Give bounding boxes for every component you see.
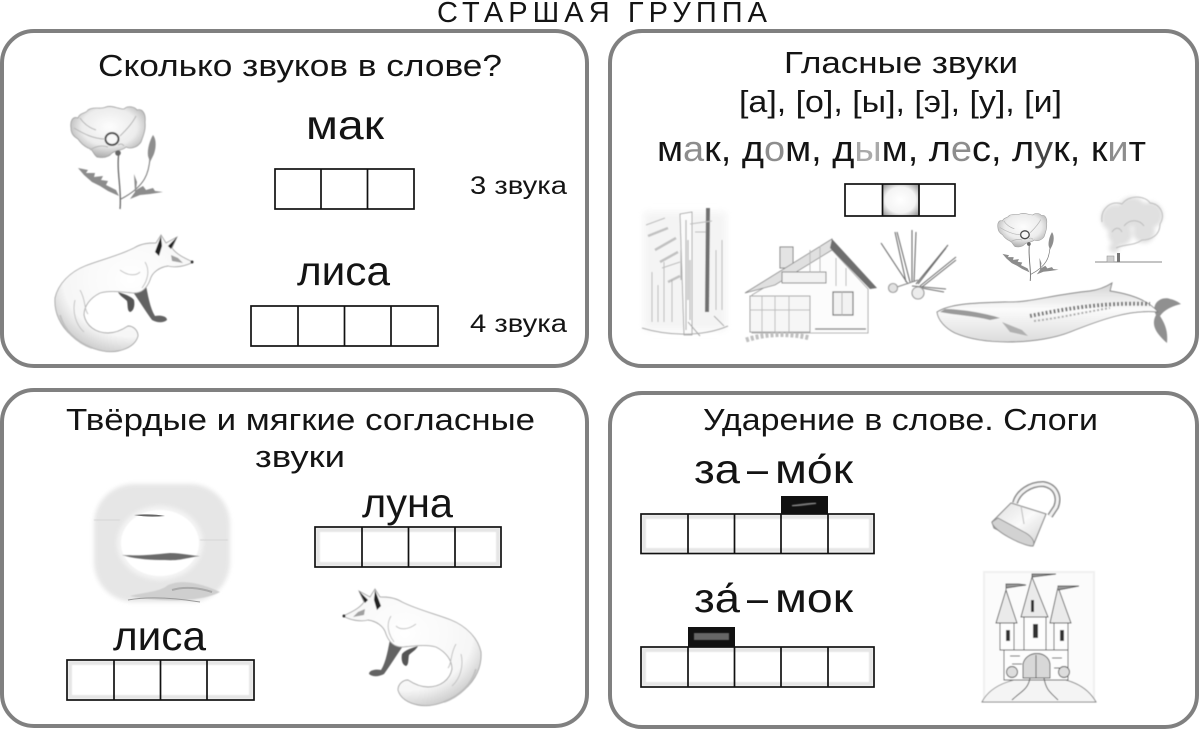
word: za-mok stressed second: мо́к [775, 446, 854, 492]
icon: padlock [992, 484, 1057, 546]
panel: how many sounds in a word [2, 31, 587, 366]
icon: house [745, 239, 877, 340]
heading: how many sounds: Сколько звуков в слове? [98, 48, 502, 83]
icon: onion plant [881, 230, 956, 299]
word: za-mok stressed first: – [747, 575, 768, 621]
sound boxes: mak [275, 169, 414, 209]
icon: small poppy [998, 213, 1059, 281]
icon: moon [94, 484, 232, 602]
panel: hard and soft consonants [2, 390, 587, 726]
vowel list: [а], [о], [ы], [э], [у], [и] [739, 84, 1062, 119]
label: 3 sounds: 3 звука [470, 172, 567, 200]
panel: vowel sounds [610, 31, 1197, 366]
heading: stress and syllables: Ударение в слове. Слоги [703, 402, 1098, 437]
word: lisa: лиса [297, 248, 390, 294]
word: za-mok stressed first [694, 575, 854, 621]
word: za-mok stressed second: за [694, 446, 740, 492]
heading second line: звуки [255, 439, 345, 474]
icon: forest [642, 208, 728, 336]
icon: fox mirrored [342, 589, 481, 706]
heading: hard and soft consonants: Твёрдые и мягкие согласные [66, 402, 535, 437]
icon: smoke [1095, 197, 1163, 262]
word: lisa: лиса [113, 613, 206, 659]
word: za-mok stressed first: мок [775, 575, 854, 621]
stress boxes: first syllable [641, 627, 874, 687]
sound boxes: lisa [67, 660, 254, 700]
panel: stress and syllables [610, 393, 1197, 727]
icon: fox [55, 235, 194, 352]
word: mak: мак [306, 102, 385, 148]
example words with grey vowels: мак, дом, дым, лес, лук, кит [657, 128, 1146, 169]
icon: poppy [71, 106, 163, 209]
icon: whale [937, 283, 1181, 343]
stress boxes: second syllable [641, 496, 874, 554]
sound boxes: luna [315, 527, 501, 567]
sound boxes with shaded middle [845, 184, 955, 216]
word: za-mok stressed second: – [747, 446, 768, 492]
icon: castle [982, 572, 1096, 702]
heading: vowel sounds: Гласные звуки [784, 45, 1018, 80]
label: 4 sounds: 4 звука [470, 310, 567, 338]
word: luna: луна [362, 480, 453, 526]
word: za-mok stressed second [694, 446, 854, 492]
sound boxes: lisa [251, 306, 438, 346]
word: za-mok stressed first: за́ [694, 575, 740, 621]
